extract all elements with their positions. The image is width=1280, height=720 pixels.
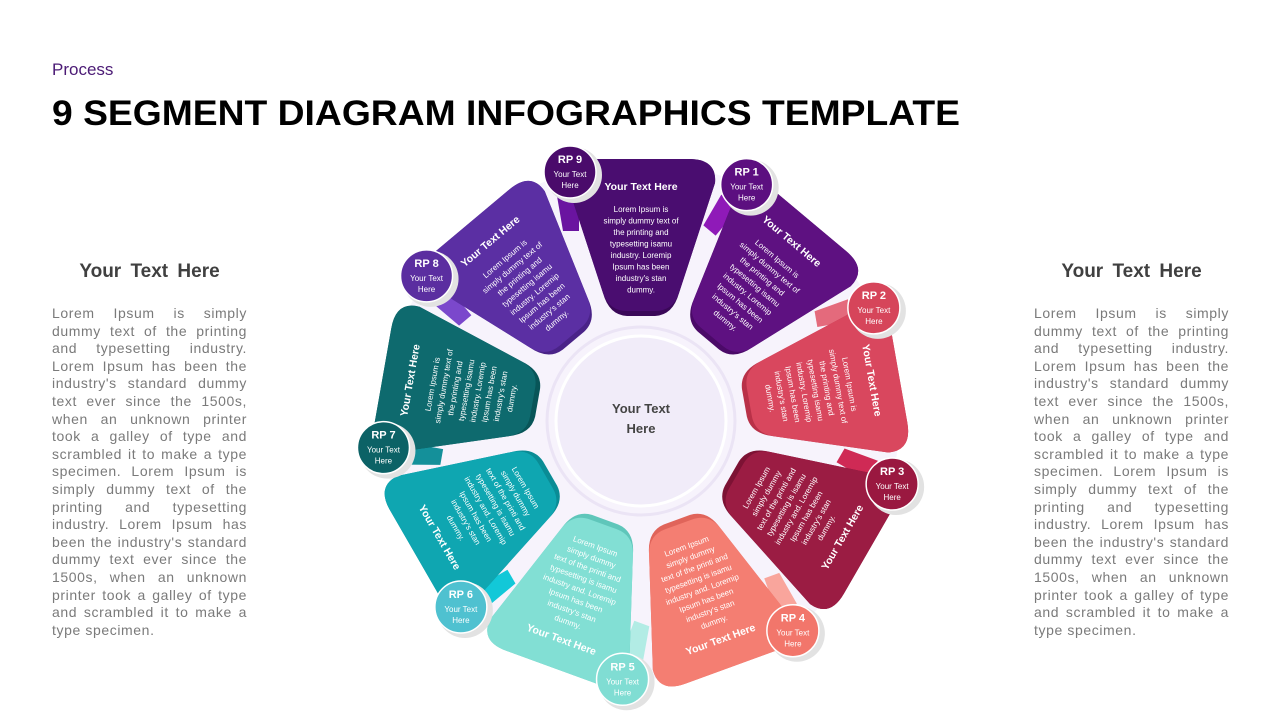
segment RP8: simply dummy text of bbox=[481, 240, 545, 295]
segment RP4: simply dummy bbox=[665, 544, 716, 570]
segment RP8: Your Text bbox=[410, 274, 444, 283]
segment RP3: Your Text Here bbox=[819, 503, 866, 572]
segment RP3: Lorem Ipsum bbox=[741, 465, 772, 510]
segment RP6: Here bbox=[452, 616, 470, 625]
segment RP6: industry's stan bbox=[449, 498, 482, 547]
segment RP6: dummy. bbox=[445, 514, 467, 542]
segment RP6: RP 6 bbox=[449, 589, 473, 601]
segment RP8: industry. Loremip bbox=[508, 271, 561, 317]
segment RP2: Your Text bbox=[857, 306, 891, 315]
segment RP9: RP 9 bbox=[558, 154, 582, 166]
segment RP7: industry's stan bbox=[492, 370, 510, 422]
segment RP9: Your Text bbox=[554, 170, 587, 179]
segment RP9: Ipsum has been bbox=[613, 262, 669, 272]
segment RP7: dummy. bbox=[505, 384, 519, 413]
segment RP8: Your Text Here bbox=[459, 214, 523, 270]
segment RP3: industry and. Loremip bbox=[773, 475, 820, 546]
segment RP6: Ipsum has been bbox=[457, 490, 494, 543]
segment RP5: industry's stan bbox=[546, 598, 597, 624]
segment RP5: text of the printi and bbox=[553, 552, 622, 584]
segment RP6 bbox=[355, 409, 607, 663]
segment RP1: Your Text bbox=[730, 183, 764, 192]
left text column: Your Text Here bbox=[79, 261, 220, 282]
segment RP9: typesetting isamu bbox=[610, 240, 672, 248]
segment RP2: industry. Loremip bbox=[794, 362, 814, 424]
subtitle: Process: Process bbox=[52, 60, 113, 79]
segment RP9: industry's stan bbox=[616, 274, 666, 283]
segment RP4 bbox=[607, 482, 843, 718]
segment RP4: RP 4 bbox=[781, 613, 806, 625]
segment RP9: Your Text Here bbox=[604, 181, 678, 193]
segment RP8: the printing and bbox=[496, 255, 544, 298]
center circle: Here bbox=[627, 421, 655, 436]
segment RP3: RP 3 bbox=[880, 466, 904, 478]
segment RP5: Here bbox=[614, 688, 632, 697]
segment RP4: dummy. bbox=[700, 613, 729, 631]
segment RP8: dummy. bbox=[543, 308, 570, 333]
segment RP6: industry and. Loremip bbox=[462, 475, 509, 547]
segment RP2: the printing and bbox=[817, 360, 836, 416]
segment RP1: the printing and bbox=[738, 255, 786, 298]
segment RP7: Lorem Ipsum is bbox=[424, 357, 442, 412]
segment RP9: simply dummy text of bbox=[603, 216, 679, 226]
segment RP5: Your Text Here bbox=[525, 622, 598, 658]
segment RP2: industry's stan bbox=[772, 370, 790, 422]
segment RP2: Ipsum has been bbox=[783, 365, 802, 423]
segment RP7: industry. Loremip bbox=[468, 361, 488, 423]
segment RP2: Here bbox=[865, 317, 883, 326]
segment RP8: RP 8 bbox=[414, 258, 439, 270]
segment RP1: simply dummy text of bbox=[738, 240, 802, 296]
segment RP9: industry. Loremip bbox=[611, 251, 672, 260]
segment RP7: Your Text Here bbox=[398, 343, 423, 417]
segment RP8: Ipsum has been bbox=[517, 281, 567, 325]
segment RP2: typesetting isamu bbox=[805, 359, 825, 422]
segment RP3: Ipsum has been bbox=[788, 490, 825, 543]
segment RP7: typesetting isamu bbox=[457, 359, 477, 422]
segment RP5: simply dummy bbox=[566, 544, 617, 570]
segment RP8: Lorem Ipsum is bbox=[481, 238, 529, 280]
right text column: Your Text Here bbox=[1061, 261, 1202, 282]
segment RP8 bbox=[372, 155, 630, 412]
segment RP3: Here bbox=[883, 493, 901, 502]
segment RP2: RP 2 bbox=[862, 290, 886, 302]
right text column: Lorem Ipsum is simply dummy text of the printing and typesetting industry. Lorem Ipsum has been the industry's standard dummy text ever since the 1500s, when an unknown printer took a galley of type and scrambled it to make a type specimen. Lorem Ipsum is simply dummy text of the printing and typesetting industry. Lorem Ipsum has been the industry's standard dummy text ever since the 1500s, when an unknown printer took a galley of type and scrambled it to make a type specimen. bbox=[1034, 305, 1229, 638]
segment RP2: Lorem Ipsum is bbox=[840, 357, 858, 412]
segment RP7: Your Text bbox=[367, 446, 401, 455]
title: 9 SEGMENT DIAGRAM INFOGRAPHICS TEMPLATE bbox=[52, 94, 960, 133]
segment RP7: the printing and bbox=[446, 360, 465, 416]
segment RP1 bbox=[626, 130, 884, 388]
segment RP7: RP 7 bbox=[371, 430, 396, 442]
segment RP3 bbox=[695, 379, 949, 631]
segment RP3: simply dummy bbox=[750, 469, 783, 518]
segment RP5: Lorem Ipsum bbox=[572, 534, 619, 559]
segment RP2: simply dummy text of bbox=[827, 348, 849, 425]
segment RP1: Your Text Here bbox=[760, 214, 823, 270]
segment RP2: Your Text Here bbox=[859, 343, 884, 418]
segment RP9: Here bbox=[561, 181, 579, 190]
segment RP2 bbox=[727, 272, 935, 476]
segment RP6: Lorem Ipsum bbox=[510, 465, 541, 511]
segment RP1: dummy. bbox=[712, 308, 739, 333]
segment RP8: typesetting isamu bbox=[500, 262, 554, 309]
segment RP4: Your Text bbox=[776, 629, 810, 638]
segment RP4: typesetting is isamu bbox=[664, 563, 733, 595]
segment RP9: dummy. bbox=[627, 286, 655, 294]
segment RP1: Ipsum has been bbox=[715, 281, 765, 325]
segment RP4: Your Text Here bbox=[684, 622, 757, 658]
segment RP4: text of the printi and bbox=[660, 552, 729, 584]
segment RP5 bbox=[473, 494, 710, 720]
segment RP6: text of the printi and bbox=[484, 467, 527, 532]
segment RP6: simply dummy bbox=[499, 469, 532, 518]
segment RP4: Ipsum has been bbox=[678, 587, 735, 614]
segment RP7: Here bbox=[375, 457, 393, 466]
segment RP3: typesetting is isamu bbox=[765, 472, 808, 538]
segment RP1: RP 1 bbox=[735, 167, 759, 179]
segment RP6: Your Text bbox=[444, 605, 478, 614]
segment RP8: Here bbox=[418, 285, 436, 294]
segment RP9: the printing and bbox=[613, 228, 669, 237]
segment RP5: Your Text bbox=[606, 677, 640, 686]
segment RP2: dummy. bbox=[763, 384, 777, 413]
segment RP1: industry's stan bbox=[710, 292, 755, 332]
segment RP5: Ipsum has been bbox=[547, 587, 604, 614]
segment RP5: industry and. Loremip bbox=[542, 572, 618, 607]
segment RP5: RP 5 bbox=[610, 661, 635, 673]
segment RP1: Here bbox=[738, 194, 756, 203]
segment RP3: Your Text bbox=[876, 482, 909, 491]
segment RP6: typesetting is isamu bbox=[474, 472, 517, 538]
segment RP1: typesetting isamu bbox=[728, 262, 782, 309]
segment RP1: industry. Loremip bbox=[721, 271, 774, 318]
segment RP1: Lorem Ipsum is bbox=[753, 238, 801, 280]
segment RP7: simply dummy text of bbox=[433, 348, 455, 424]
segment RP4: Lorem Ipsum bbox=[663, 534, 710, 559]
segment RP3: dummy. bbox=[815, 514, 837, 542]
segment RP9: Lorem Ipsum is bbox=[614, 205, 668, 214]
segment RP7 bbox=[348, 300, 550, 507]
segment RP8: industry's stan bbox=[527, 292, 572, 332]
left text column: Lorem Ipsum is simply dummy text of the printing and typesetting industry. Lorem Ipsum has been the industry's standard dummy text ever since the 1500s, when an unknown printer took a galley of type and scrambled it to make a type specimen. Lorem Ipsum is simply dummy text of the printing and typesetting industry. Lorem Ipsum has been the industry's standard dummy text ever since the 1500s, when an unknown printer took a galley of type and scrambled it to make a type specimen. bbox=[52, 305, 247, 638]
segment RP4: industry's stan bbox=[685, 598, 736, 624]
segment RP7: Ipsum has been bbox=[480, 365, 499, 423]
segment RP4: Here bbox=[784, 640, 802, 649]
segment RP3: industry's stan bbox=[800, 498, 833, 547]
center circle: Your Text bbox=[612, 401, 671, 416]
segment RP5: dummy. bbox=[553, 613, 582, 631]
segment RP6: Your Text Here bbox=[416, 503, 463, 572]
center circle bbox=[547, 327, 735, 515]
segment RP9 bbox=[544, 146, 715, 316]
segment RP5: typesetting is isamu bbox=[549, 563, 618, 595]
segment RP4: industry and. Loremip bbox=[665, 572, 741, 607]
background disc bbox=[383, 163, 899, 679]
segment RP3: text of the printi and bbox=[755, 467, 798, 532]
